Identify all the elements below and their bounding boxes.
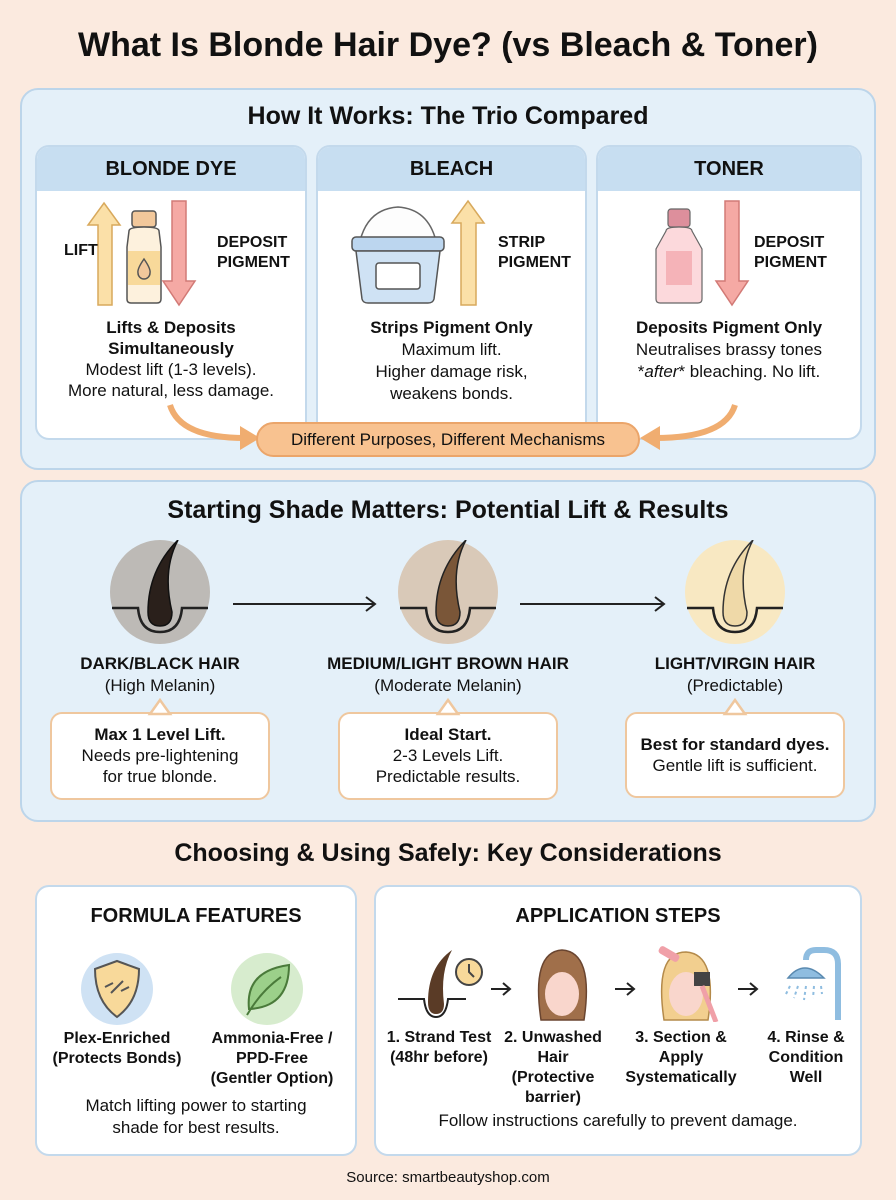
label: plex: Plex-Enriched [64, 1030, 170, 1047]
heading: how it works: How It Works: The Trio Compared [248, 102, 648, 130]
callout pointers [148, 698, 748, 716]
card: toner: TONER [694, 158, 764, 180]
text: bleach description: Maximum lift. [401, 340, 502, 359]
text: toner description [636, 318, 822, 381]
icon: shield [81, 953, 153, 1025]
label: deposit pigment: DEPOSIT [754, 234, 824, 251]
callout pill: different purposes [256, 422, 640, 457]
label: step 3: Apply [659, 1049, 703, 1066]
label: strip pigment: PIGMENT [498, 254, 571, 271]
text: blonde dye description [68, 318, 274, 400]
label: step 4: 4. Rinse & [767, 1029, 845, 1046]
panel: formula features [35, 885, 357, 1156]
text: blonde dye description: More natural, less damage. [68, 381, 274, 400]
panel: application steps [374, 885, 862, 1156]
label: step 1 [387, 1029, 492, 1066]
callout: dark [50, 712, 270, 800]
label: light hair: LIGHT/VIRGIN HAIR [655, 654, 815, 673]
label: step 2: (Protective [512, 1069, 594, 1086]
label: strip pigment: STRIP [498, 234, 545, 251]
label: dark hair [80, 654, 240, 695]
text: bleach description: Strips Pigment Only [370, 318, 533, 337]
text: bleach description: weakens bonds. [390, 384, 513, 403]
heading: formula features: FORMULA FEATURES [90, 905, 302, 927]
label: ammonia free: Ammonia-Free / [212, 1030, 332, 1047]
callout: dark: Needs pre-lightening [82, 746, 238, 765]
arrows: curved orange into pill [167, 404, 738, 450]
label: light hair: (Predictable) [687, 676, 783, 695]
label: deposit pigment: DEPOSIT [217, 234, 287, 251]
callout: light: Gentle lift is sufficient. [652, 756, 818, 775]
callout: light: Best for standard dyes. [641, 735, 829, 754]
label: step 3: 3. Section & [635, 1029, 727, 1046]
card: bleach [316, 145, 587, 440]
panel: starting shade [20, 480, 876, 822]
text: match lifting power: shade for best results. [112, 1118, 280, 1137]
card: blonde dye [35, 145, 307, 440]
label: deposit pigment [754, 234, 827, 271]
label: step 1: (48hr before) [390, 1049, 488, 1066]
text: bleach description: Higher damage risk, [375, 362, 528, 381]
label: dark hair: DARK/BLACK HAIR [80, 654, 240, 673]
card: blonde dye: BLONDE DYE [105, 158, 237, 180]
label: light hair [655, 654, 815, 695]
callout: dark: Max 1 Level Lift. [94, 725, 226, 744]
label: step 2: 2. Unwashed [504, 1029, 602, 1046]
label: step 2 [504, 1029, 602, 1106]
label: step 2: Hair [537, 1049, 569, 1066]
label: step 4: Well [790, 1069, 822, 1086]
callout: medium [338, 712, 558, 800]
text: match lifting power: Match lifting power to starting [85, 1096, 307, 1115]
label: medium hair [327, 654, 569, 695]
callout: medium: Ideal Start. [405, 725, 491, 744]
label: strip pigment [498, 234, 571, 271]
text: match lifting power [85, 1096, 307, 1137]
label: ammonia free: (Gentler Option) [211, 1070, 333, 1087]
label: deposit pigment [217, 234, 290, 271]
label: plex: (Protects Bonds) [53, 1050, 181, 1067]
card: bleach: BLEACH [410, 158, 493, 180]
callout: dark: for true blonde. [103, 767, 217, 786]
text: toner description: *after* bleaching. No lift. [638, 362, 820, 381]
heading: application steps: APPLICATION STEPS [515, 905, 721, 927]
text: blonde dye description: Modest lift (1-3 levels). [86, 360, 256, 379]
label: ammonia free: PPD-Free [236, 1050, 308, 1067]
label: dark hair: (High Melanin) [105, 676, 215, 695]
text: toner description: Deposits Pigment Only [636, 318, 822, 337]
label: ammonia free [211, 1030, 333, 1087]
text: blonde dye description: Lifts & Deposits [106, 318, 236, 337]
callout: medium: 2-3 Levels Lift. [393, 746, 503, 765]
text: toner description: Neutralises brassy tones [636, 340, 822, 359]
label: step 4: Condition [769, 1049, 843, 1066]
text: blonde dye description: Simultaneously [108, 339, 234, 358]
card: toner [596, 145, 862, 440]
label: step 4 [767, 1029, 845, 1086]
icon: toner bottle and deposit arrow [655, 200, 750, 306]
label: step 2: barrier) [525, 1089, 581, 1106]
source: Source: smartbeautyshop.com [346, 1169, 550, 1186]
label: lift: LIFT [64, 242, 98, 259]
label: step 3 [625, 1029, 737, 1086]
icon: bleach tub and strip arrow [351, 200, 486, 306]
label: medium hair: (Moderate Melanin) [374, 676, 522, 695]
label: plex [53, 1030, 181, 1067]
label: step 1: 1. Strand Test [387, 1029, 491, 1046]
label: deposit pigment: PIGMENT [754, 254, 827, 271]
title: What Is Blonde Hair Dye? (vs Bleach & Toner) [78, 26, 818, 64]
icons: hair follicles and arrows [110, 540, 785, 644]
callout pill: different purposes: Different Purposes, Different Mechanisms [291, 430, 605, 449]
text: follow instructions: Follow instructions carefully to prevent damage. [438, 1111, 798, 1130]
icons: steps [398, 946, 841, 1022]
panel: how it works [20, 88, 876, 470]
label: medium hair: MEDIUM/LIGHT BROWN HAIR [327, 654, 569, 673]
text: bleach description [370, 318, 533, 403]
icon: lift arrow, bottle, deposit arrow [86, 200, 196, 306]
callout: light [625, 712, 845, 798]
heading: starting shade: Starting Shade Matters: Potential Lift & Results [167, 496, 729, 524]
icon: leaf [231, 953, 303, 1025]
label: step 3: Systematically [625, 1069, 737, 1086]
heading: choosing & using safely: Choosing & Using Safely: Key Considerations [174, 839, 722, 867]
callout: medium: Predictable results. [376, 767, 520, 786]
label: deposit pigment: PIGMENT [217, 254, 290, 271]
